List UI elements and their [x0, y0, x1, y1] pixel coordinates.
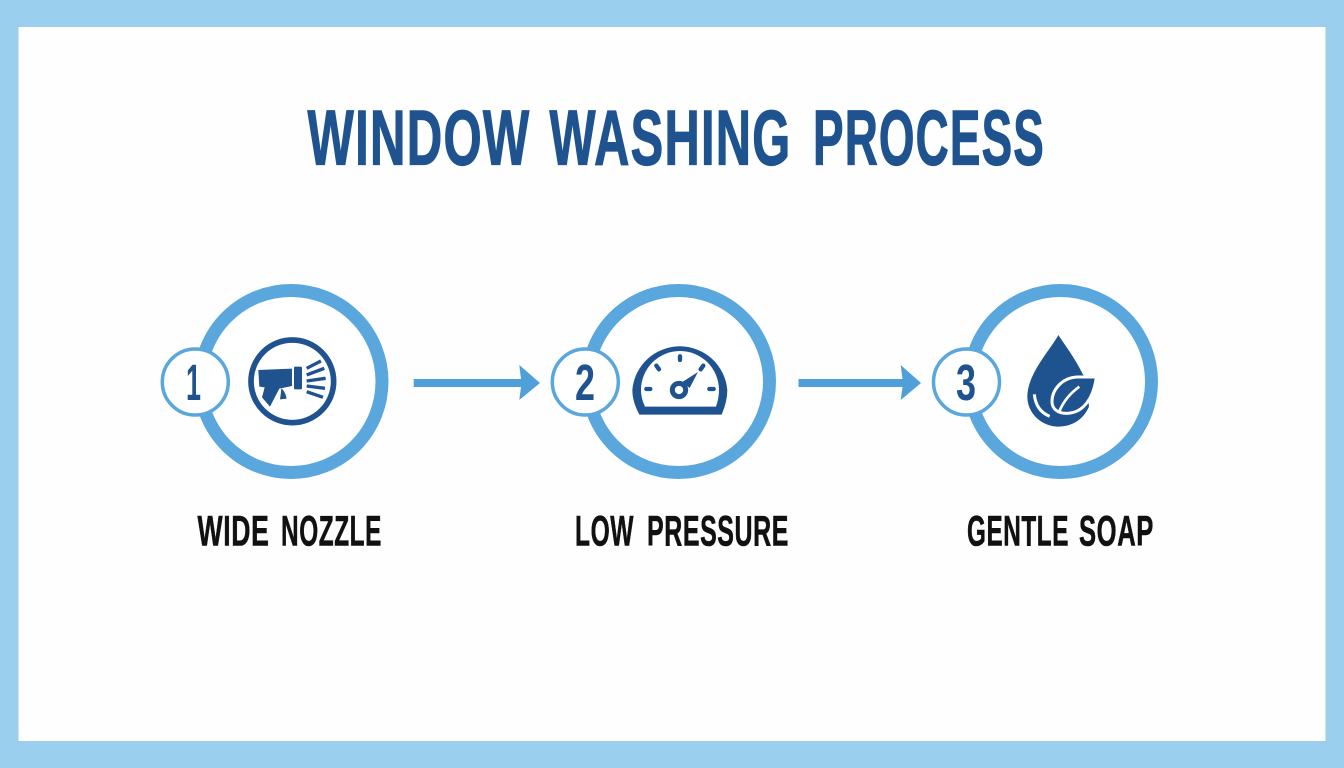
icon: pressure gauge	[632, 346, 727, 415]
step 3 ring	[970, 290, 1152, 472]
step 2: low pressure	[552, 290, 770, 472]
label: wide nozzle	[198, 508, 382, 556]
icon: spray nozzle	[251, 340, 334, 423]
icon: water drop with leaf	[1027, 335, 1096, 427]
step 1 number badge: 1	[186, 354, 201, 411]
label: low pressure	[575, 508, 789, 556]
step 2 number badge	[552, 349, 618, 415]
label: wide nozzle: NOZZLE	[281, 508, 382, 556]
label: gentle soap: SOAP	[1079, 508, 1154, 556]
step 1 number badge	[162, 349, 228, 415]
step 1: wide nozzle	[162, 290, 382, 472]
step 3 number badge	[934, 349, 1000, 415]
step 1 ring	[200, 290, 382, 472]
arrow 2	[798, 365, 921, 400]
step 2 ring	[588, 290, 770, 472]
step 3 number badge: 3	[956, 354, 976, 411]
arrow 1	[414, 365, 540, 400]
label: low pressure: LOW	[575, 508, 634, 556]
title: WINDOW	[308, 94, 530, 182]
title: PROCESS	[813, 94, 1045, 182]
title	[308, 94, 1045, 182]
step 3: gentle soap	[934, 290, 1152, 472]
label: wide nozzle: WIDE	[198, 508, 270, 556]
step 2 number badge: 2	[575, 354, 595, 411]
label: gentle soap: GENTLE	[967, 508, 1069, 556]
label: low pressure: PRESSURE	[647, 508, 789, 556]
title: WASHING	[550, 94, 792, 182]
